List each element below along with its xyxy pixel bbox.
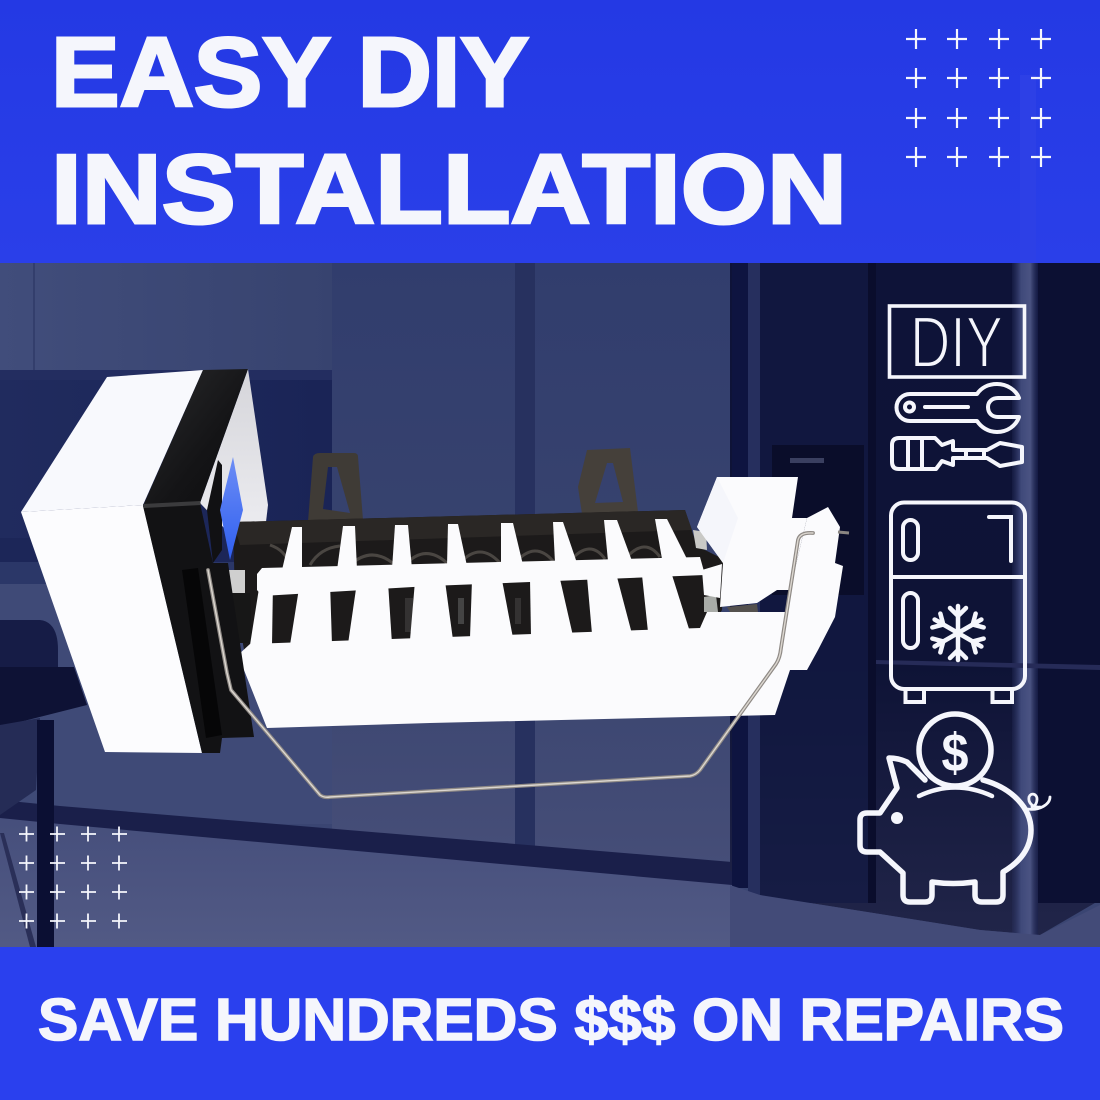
snowflake [931, 606, 985, 660]
metal gear parts [693, 530, 758, 612]
icon: wrench [896, 384, 1019, 432]
bottom banner [0, 947, 1100, 1100]
product: ice maker [21, 369, 849, 797]
title line: EASY DIY: EASY DIY [51, 17, 529, 127]
pin [838, 532, 849, 533]
blue label [220, 457, 243, 560]
wire handle [208, 533, 813, 797]
floor [0, 800, 745, 947]
icon: DIY sign: DIY [910, 303, 1003, 383]
front fins [250, 575, 690, 645]
refrigerator [730, 263, 1100, 947]
upper cabinets [0, 263, 332, 370]
icon: piggy bank with coin [860, 714, 1050, 902]
background photo: kitchen [0, 263, 1100, 947]
plus pattern: bottom left [19, 826, 127, 928]
open shelf recess [0, 370, 332, 824]
icon: piggy bank with coin: $ [942, 723, 968, 783]
icon: refrigerator [891, 502, 1025, 702]
white front cover [21, 370, 203, 753]
mounting bracket right [578, 448, 638, 514]
cross bar [257, 557, 705, 596]
mounting bracket left [308, 453, 363, 522]
title line: INSTALLATION: INSTALLATION [51, 134, 847, 244]
bottom tagline: SAVE HUNDREDS $$$ ON REPAIRS [38, 987, 1064, 1053]
end plate [782, 507, 843, 670]
motor housing [697, 477, 807, 607]
icon: screwdriver [892, 438, 1022, 469]
wall panels [332, 263, 732, 873]
side flap [200, 369, 268, 530]
black frame [143, 369, 254, 753]
back fins [282, 519, 687, 570]
front tray body [238, 612, 790, 728]
chair and table [0, 620, 87, 947]
plus pattern: top right [906, 29, 1051, 167]
dark tray [227, 510, 725, 655]
top banner [0, 0, 1100, 263]
